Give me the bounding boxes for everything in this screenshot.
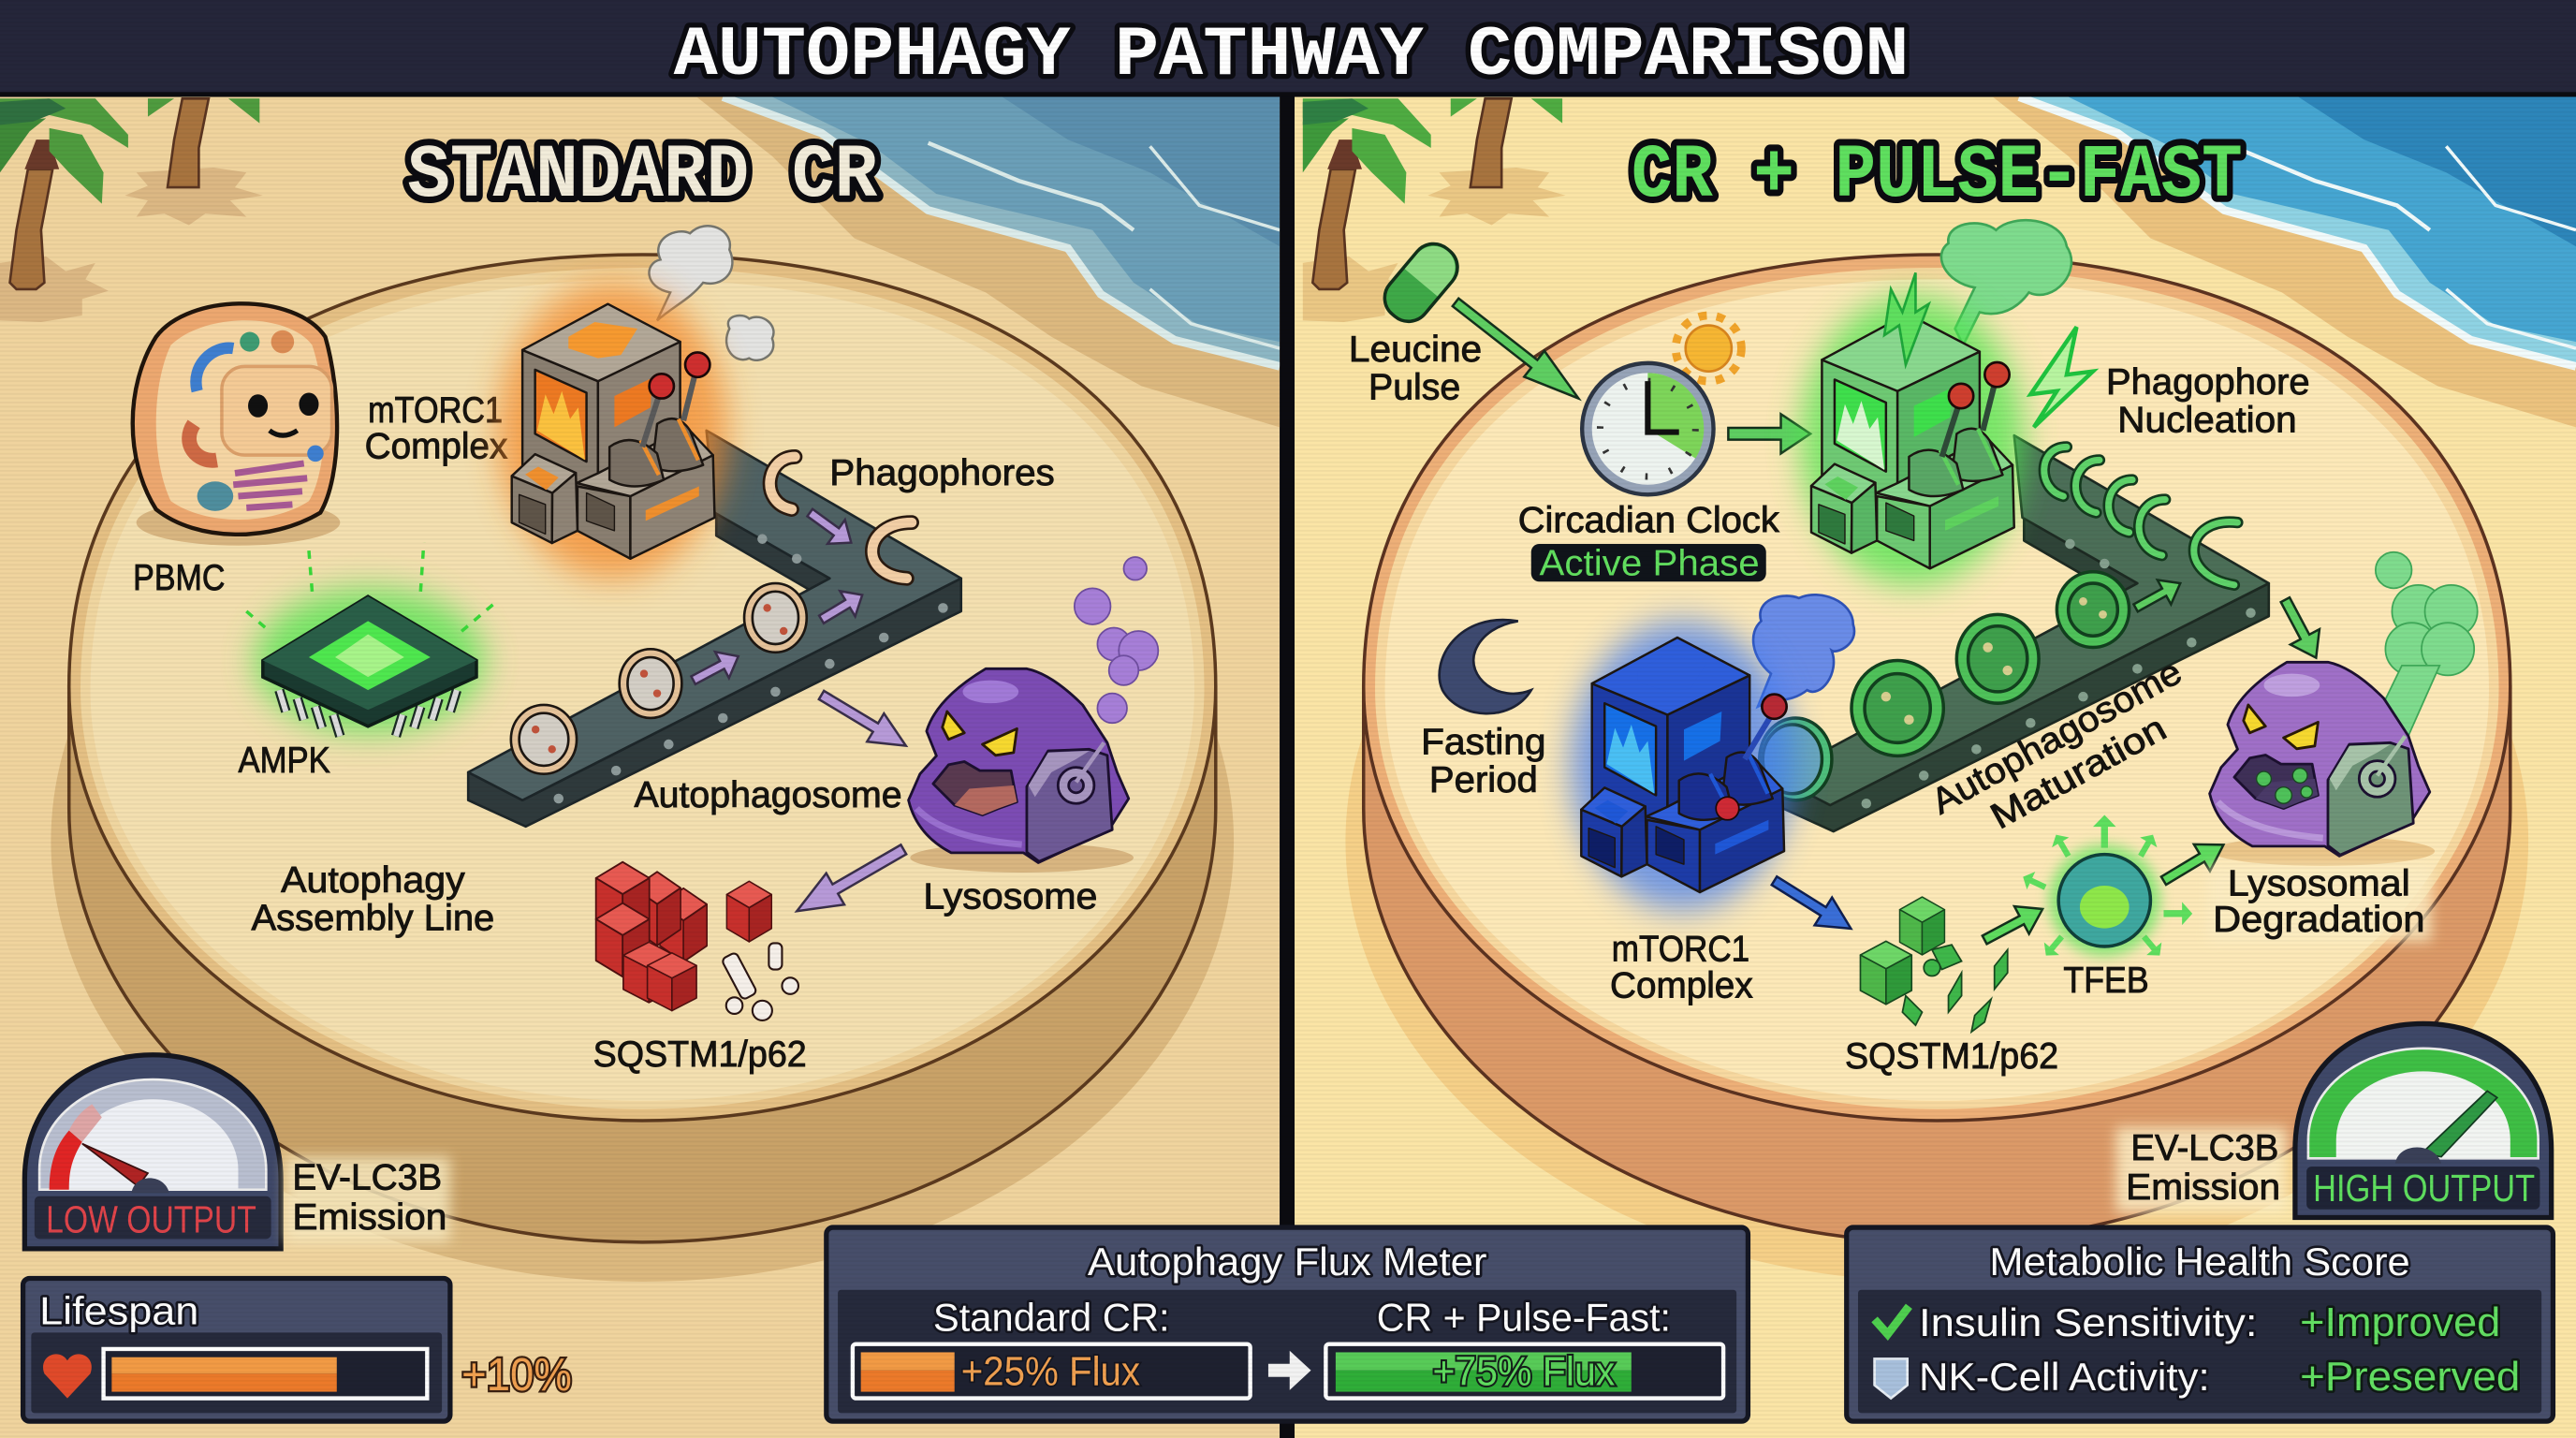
panel: metabolic health score <box>1847 1227 2553 1421</box>
icon: shield <box>1875 1358 1908 1399</box>
label: mTORC1 complex <box>1610 930 1753 1005</box>
metric: insulin sensitivity: Insulin Sensitivity: <box>1919 1300 2258 1344</box>
label: autophagosome maturation: Autophagosome <box>1925 652 2188 822</box>
icon: check mark <box>1875 1306 1909 1334</box>
icon: moon <box>1440 620 1531 713</box>
label: EV-LC3B emission: Emission <box>2126 1167 2280 1208</box>
platform disk <box>1345 255 2528 1282</box>
heading: CR + pulse-fast: CR + PULSE-FAST <box>1632 134 2243 219</box>
label: mTORC1 complex: Complex <box>365 427 507 467</box>
flux heading: Autophagy Flux Meter <box>1088 1240 1486 1284</box>
icon: lightning <box>2030 327 2093 427</box>
arrow: curved to lysosome <box>2271 592 2331 666</box>
label: autophagy assembly line: Autophagy <box>281 860 465 901</box>
icon: red aggregated cubes <box>596 862 798 1020</box>
machine: mTORC1 active green <box>1801 296 2024 585</box>
value: preserved: +Preserved <box>2300 1354 2520 1400</box>
panel: standard CR <box>0 97 1280 1438</box>
label: leucine pulse <box>1349 330 1482 407</box>
lifespan value: +10% <box>461 1350 572 1401</box>
icon: TFEB orb <box>2019 815 2192 961</box>
icon: lysosome monster <box>909 668 1134 873</box>
panel: lifespan <box>23 1278 450 1421</box>
label: phagophore nucleation: Nucleation <box>2117 401 2297 441</box>
gauge: low output <box>24 1055 281 1249</box>
icon: white smoke <box>649 226 773 360</box>
label: phagophores: Phagophores <box>829 453 1055 493</box>
label: lysosome: Lysosome <box>923 877 1097 917</box>
icon: lysosome degrading <box>2210 662 2435 866</box>
label: TFEB: TFEB <box>2063 961 2149 1001</box>
conveyor belt <box>468 431 961 827</box>
label: autophagosome: Autophagosome <box>634 775 902 815</box>
arrow: leucine to clock <box>1445 289 1588 411</box>
conveyor belt <box>1776 435 2269 831</box>
arrow: clock to machine <box>1728 414 1810 453</box>
flux bar: pulse-fast <box>1325 1344 1723 1399</box>
label: autophagy assembly line: Assembly Line <box>252 898 494 938</box>
icon: purple smoke <box>1075 557 1158 723</box>
palm trees <box>1303 98 1566 322</box>
label: fasting period <box>1421 723 1546 800</box>
icon: lightning over machine <box>1884 272 1928 365</box>
beach and ocean background <box>696 97 1280 427</box>
flux bar: standard: +25% Flux <box>961 1349 1140 1395</box>
label: lysosomal degradation: Lysosomal <box>2228 864 2410 904</box>
flux bar: pulse-fast: +75% Flux <box>1432 1349 1615 1395</box>
icon: green cubes and fragments <box>1860 897 2008 1032</box>
arrow: TFEB to lysosome <box>2156 831 2232 894</box>
label: EV-LC3B emission <box>285 1157 450 1242</box>
label: EV-LC3B emission <box>2116 1127 2287 1212</box>
label: mTORC1 complex <box>365 390 507 467</box>
label: standard CR: Standard CR: <box>933 1296 1170 1340</box>
panel: autophagy flux meter <box>827 1227 1748 1421</box>
palm trees <box>0 98 263 322</box>
label: autophagosome maturation: Maturation <box>1983 708 2173 837</box>
icon: circadian clock <box>1582 363 1714 494</box>
icon: leucine capsule <box>1376 235 1466 330</box>
label: fasting period: Fasting <box>1421 723 1546 763</box>
arrow: flux comparison <box>1268 1351 1311 1390</box>
icon: blue smoke <box>1753 594 1854 707</box>
label: leucine pulse: Pulse <box>1368 367 1460 407</box>
lifespan bar <box>104 1349 427 1399</box>
arrows: purple flow <box>686 501 915 927</box>
metric: NK-cell activity: NK-Cell Activity: <box>1919 1355 2210 1399</box>
arrows: TFEB rays <box>2019 815 2192 961</box>
label: AMPK: AMPK <box>238 741 330 781</box>
label: leucine pulse: Leucine <box>1349 330 1482 370</box>
label: SQSTM1/p62: SQSTM1/p62 <box>593 1034 807 1075</box>
metabolic heading: Metabolic Health Score <box>1989 1240 2410 1284</box>
gauge label: HIGH OUTPUT <box>2313 1167 2535 1210</box>
label: CR + pulse-fast: CR + Pulse-Fast: <box>1377 1296 1671 1340</box>
label: lysosomal degradation <box>2208 864 2432 942</box>
panel: CR plus pulse-fast <box>1295 97 2576 1438</box>
icon: sun <box>1676 315 1741 381</box>
icon: green smoke <box>1941 220 2071 345</box>
machine: mTORC1 blue <box>1571 621 1794 910</box>
gauge: high output <box>2295 1023 2552 1218</box>
panel divider <box>1280 97 1295 1438</box>
icon: phagophore coils <box>2044 447 2237 585</box>
label: EV-LC3B emission: Emission <box>292 1197 446 1238</box>
value: improved: +Improved <box>2300 1299 2500 1345</box>
lifespan heading: Lifespan <box>39 1289 198 1333</box>
heading: standard CR: STANDARD CR <box>407 134 878 219</box>
icon: PBMC cell <box>133 303 340 546</box>
beach and ocean background <box>1993 97 2576 427</box>
platform disk <box>51 255 1234 1282</box>
badge: active phase: Active Phase <box>1540 543 1760 583</box>
label: EV-LC3B emission: EV-LC3B <box>2130 1128 2278 1168</box>
label: fasting period: Period <box>1429 760 1538 800</box>
icon: AMPK chip <box>246 542 493 736</box>
icon: green smoke from lysosome <box>2374 552 2478 740</box>
icon: heart <box>43 1354 92 1399</box>
label: SQSTM1/p62: SQSTM1/p62 <box>1845 1036 2058 1077</box>
icon: phagophores <box>770 457 912 579</box>
label: phagophore nucleation: Phagophore <box>2106 362 2310 403</box>
label: mTORC1 complex: mTORC1 <box>1612 930 1749 970</box>
flux bar: standard <box>853 1344 1251 1399</box>
arrow: to TFEB <box>1977 895 2050 954</box>
gauge label: LOW OUTPUT <box>46 1197 256 1240</box>
title bar <box>0 0 2576 98</box>
icon: green autophagosomes <box>1760 572 2130 800</box>
arrow: to lysosome belt <box>2129 571 2187 620</box>
title: AUTOPHAGY PATHWAY COMPARISON <box>674 15 1909 95</box>
label: circadian clock: Circadian Clock <box>1518 501 1779 541</box>
label: autophagy assembly line <box>252 860 494 938</box>
arrow: blue to aggregates <box>1765 867 1860 943</box>
icon: autophagosomes <box>511 583 807 774</box>
label: mTORC1 complex: Complex <box>1610 965 1753 1005</box>
label: mTORC1 complex: mTORC1 <box>368 390 503 431</box>
machine: mTORC1 furnace <box>498 283 728 579</box>
label: EV-LC3B emission: EV-LC3B <box>292 1158 442 1198</box>
label: phagophore nucleation <box>2106 362 2310 441</box>
label: lysosomal degradation: Degradation <box>2213 900 2425 940</box>
label: PBMC: PBMC <box>133 558 225 598</box>
